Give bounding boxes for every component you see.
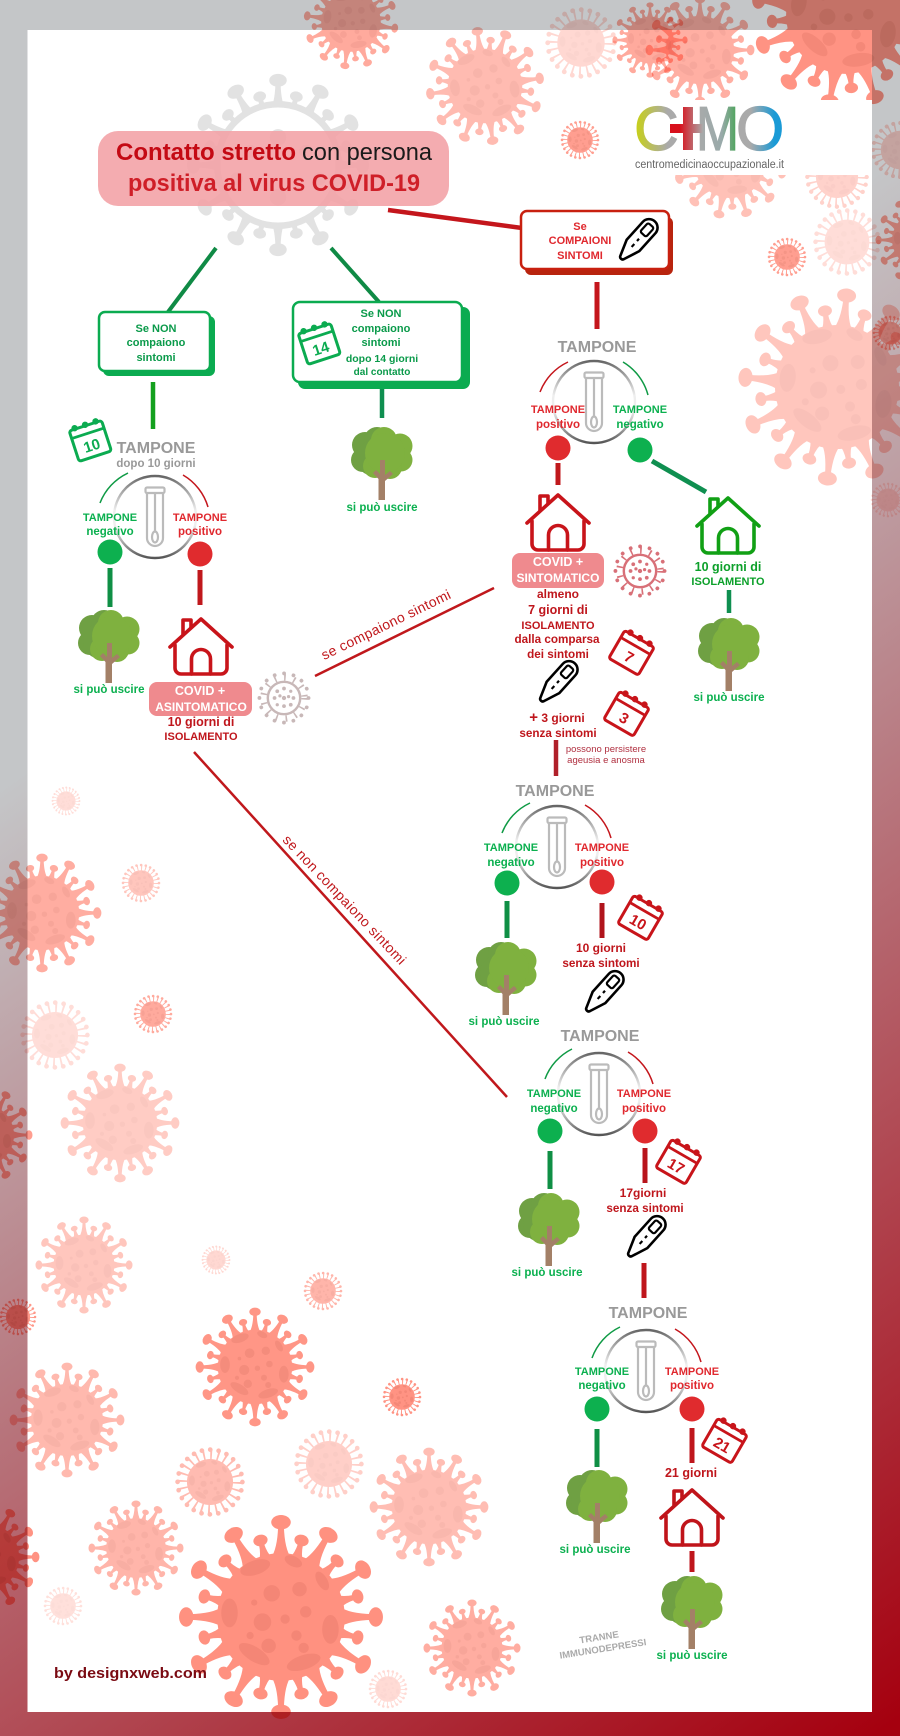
note: possono persistere: possono persistere [566,744,646,755]
house icon: isolation green [697,498,759,553]
connector: green isolation to tree [727,590,731,613]
icon: grey virus [259,673,309,723]
note: possono persistere: ageusia e anosma [567,755,646,766]
text: almeno 7 giorni di isolamento: dei sintomi [527,648,589,661]
box: se non compaiono sintomi dopo 14 giorni: Se NON [361,308,402,320]
connector: block C negative to tree [504,901,510,938]
box: se non compaiono sintomi: sintomi [136,352,176,364]
tampone block D: TAMPONE [617,1088,671,1100]
tampone block A: dopo 10 giorni: negativo [86,526,134,538]
tampone block A: dopo 10 giorni: TAMPONE [173,512,227,524]
icon: calendar 17: 17 [664,1155,687,1178]
note: tranne immunodepressi: IMMUNODEPRESSI [559,1637,647,1662]
tree: si puo uscire, 14 days: si può uscire [347,502,417,514]
tree: si puo uscire, block E [560,1470,630,1556]
tampone block B: first symptomatic test: negativo [616,419,664,431]
tampone block C [484,783,629,896]
tree: si puo uscire, block C: si può uscire [469,1016,539,1028]
title box: Contatto stretto [116,139,296,166]
tampone block B: first symptomatic test: TAMPONE [531,404,585,416]
badge: covid sintomatico [512,553,604,588]
connector: title to symptoms box [388,210,522,228]
box: se non compaiono sintomi dopo 14 giorni [293,302,470,389]
text: almeno 7 giorni di isolamento [514,587,600,661]
text: almeno 7 giorni di isolamento: ISOLAMENTO [521,620,595,632]
tampone block E: TAMPONE [665,1366,719,1378]
house icon: 21 giorni [661,1490,723,1545]
tampone block B: first symptomatic test [531,339,667,462]
credit: by designxweb.com: by designxweb.com [54,1665,207,1682]
box: se non compaiono sintomi dopo 14 giorni: compaiono [352,323,411,335]
icon: thermometer [581,968,627,1016]
text: 10 giorni di isolamento [164,715,238,743]
connector: se non compaiono sintomi: se non compaiono sintomi [280,832,410,968]
text: 17 giorni senza sintomi: 17giorni [620,1186,666,1200]
text: 10 giorni senza sintomi: senza sintomi [562,957,640,970]
tampone block A: dopo 10 giorni: 10 [81,436,103,457]
title box: con persona [302,139,433,166]
icon: calendar 7 [609,627,656,675]
tampone block D: TAMPONE [561,1028,640,1045]
icon: calendar 21: 21 [710,1434,733,1457]
text: 10 giorni senza sintomi [562,941,640,970]
box: se non compaiono sintomi dopo 14 giorni: sintomi [361,337,401,349]
tampone block C: negativo [487,857,535,869]
logo: CMO [634,95,872,175]
connector: 14-day box to tree [380,389,384,418]
tampone block C: positivo [580,857,624,869]
icon: calendar 10 [618,892,665,940]
house icon: covid asintomatico [170,619,232,674]
badge: covid asintomatico [149,682,252,716]
box: se compaioni sintomi [521,211,673,275]
text: 10 giorni senza sintomi: 10 giorni [576,941,626,955]
tree: si puo uscire, final [657,1576,727,1662]
tampone block B: first symptomatic test: TAMPONE [558,339,637,356]
tampone block A: dopo 10 giorni: TAMPONE [117,440,196,457]
icon: calendar 3 [604,688,651,736]
tree: si puo uscire, block D [512,1193,582,1279]
tree: si puo uscire, block A [74,610,144,696]
text: 10 giorni di isolamento green [691,560,765,588]
box: se compaioni sintomi: SINTOMI [557,250,603,262]
tampone block A: dopo 10 giorni: positivo [178,526,222,538]
tampone block C: TAMPONE [575,842,629,854]
connector: positive to red house [556,463,560,485]
box: se compaioni sintomi: COMPAIONI [549,235,611,247]
title box [98,131,449,206]
text: almeno 7 giorni di isolamento: almeno [537,587,579,601]
note: tranne immunodepressi [557,1625,647,1662]
title box: positiva al virus COVID-19 [128,170,420,197]
tree: si puo uscire, 14 days [347,427,417,514]
connector: block C positive [600,903,604,938]
tampone block A: dopo 10 giorni: TAMPONE [83,512,137,524]
icon: thermometer [535,658,581,706]
icon: calendar 3: 3 [616,709,632,728]
badge: covid sintomatico: COVID + [533,555,583,569]
tampone block D [527,1028,671,1144]
icon: calendar 17 [656,1136,703,1184]
tree: si puo uscire, block E: si può uscire [560,1544,630,1556]
logo: CMO: centromedicinaoccupazionale.it [635,159,785,171]
tampone block D: negativo [530,1103,578,1115]
text: 10 giorni di isolamento green: ISOLAMENTO [691,576,765,588]
logo: CMO: M [696,95,739,164]
text: 10 giorni di isolamento: 10 giorni di [168,715,234,729]
tampone block E: TAMPONE [575,1366,629,1378]
connector: block E negative to tree [594,1429,600,1467]
connector: left box to tampone [151,382,155,429]
icon: calendar 7: 7 [621,648,637,667]
text: piu 3 giorni senza sintomi: + 3 giorni [529,709,585,726]
connector: positive to house [198,570,202,605]
text: almeno 7 giorni di isolamento: dalla comparsa [514,633,600,646]
tree: si puo uscire, block A: si può uscire [74,684,144,696]
tampone block E [575,1305,719,1422]
connector: negative to tree [108,568,112,607]
text: almeno 7 giorni di isolamento: 7 giorni di [528,603,588,617]
icon: red virus [615,546,665,596]
connector: house to tree [690,1551,694,1572]
note: tranne immunodepressi: TRANNE [579,1629,620,1646]
connector: se compaiono sintomi [315,586,494,676]
text: 21 giorni: 21 giorni [665,1466,717,1480]
tree: si puo uscire, block B: si può uscire [694,692,764,704]
tampone block E: negativo [578,1380,626,1392]
connector: to tampone block E [642,1263,646,1298]
text: 10 giorni di isolamento: ISOLAMENTO [164,731,238,743]
connector: se non compaiono sintomi [194,752,507,1097]
tampone block B: first symptomatic test: TAMPONE [613,404,667,416]
connector: block D positive [642,1148,648,1183]
note: possono persistere [566,744,646,766]
tree: si puo uscire, block D: si può uscire [512,1267,582,1279]
connector: title to 14-days box [331,248,379,302]
box: se non compaiono sintomi: compaiono [127,337,186,349]
connector: to tampone block C [554,740,558,776]
tampone block A: dopo 10 giorni: dopo 10 giorni [116,458,196,470]
box: se non compaiono sintomi dopo 14 giorni: dopo 14 giorni [346,353,418,365]
tampone block C: TAMPONE [484,842,538,854]
box: se non compaiono sintomi dopo 14 giorni: 14 [310,338,332,360]
house icon: covid sintomatico [527,495,589,550]
connector: negative to green house [652,461,706,492]
connector: symptoms box to tampone [594,282,600,329]
connector: title to no-symptoms box [168,248,216,312]
logo: CMO: O [736,95,784,164]
tree: si puo uscire, block C [469,942,539,1028]
box: se non compaiono sintomi [99,312,215,376]
tampone block C: TAMPONE [516,783,595,800]
tampone block E: TAMPONE [609,1305,688,1322]
box: se compaioni sintomi: Se [573,221,587,233]
box: se non compaiono sintomi dopo 14 giorni: dal contatto [354,367,410,378]
tree: si puo uscire, block B [694,618,764,704]
tampone block B: first symptomatic test: positivo [536,419,580,431]
tampone block A: dopo 10 giorni [68,416,227,566]
text: 17 giorni senza sintomi: senza sintomi [606,1202,684,1215]
logo: CMO: C [634,95,679,164]
text: piu 3 giorni senza sintomi [519,709,597,740]
tampone block D: positivo [622,1103,666,1115]
text: 17 giorni senza sintomi [606,1186,684,1215]
badge: covid sintomatico: SINTOMATICO [517,571,599,585]
tampone block D: TAMPONE [527,1088,581,1100]
tree: si puo uscire, final: si può uscire [657,1650,727,1662]
connector: block D negative to tree [548,1151,552,1189]
text: piu 3 giorni senza sintomi: senza sintomi [519,727,597,740]
icon: thermometer [623,1213,669,1261]
connector: se compaiono sintomi: se compaiono sintomi [318,586,453,663]
badge: covid asintomatico: ASINTOMATICO [155,700,247,714]
badge: covid asintomatico: COVID + [175,684,225,698]
connector: block E positive [690,1428,694,1463]
icon: calendar 21 [702,1415,749,1463]
text: 10 giorni di isolamento green: 10 giorni di [695,560,761,574]
grey central virus behind the title [187,74,369,256]
icon: calendar 10: 10 [626,911,649,934]
tampone block E: positivo [670,1380,714,1392]
box: se non compaiono sintomi: Se NON [136,323,177,335]
